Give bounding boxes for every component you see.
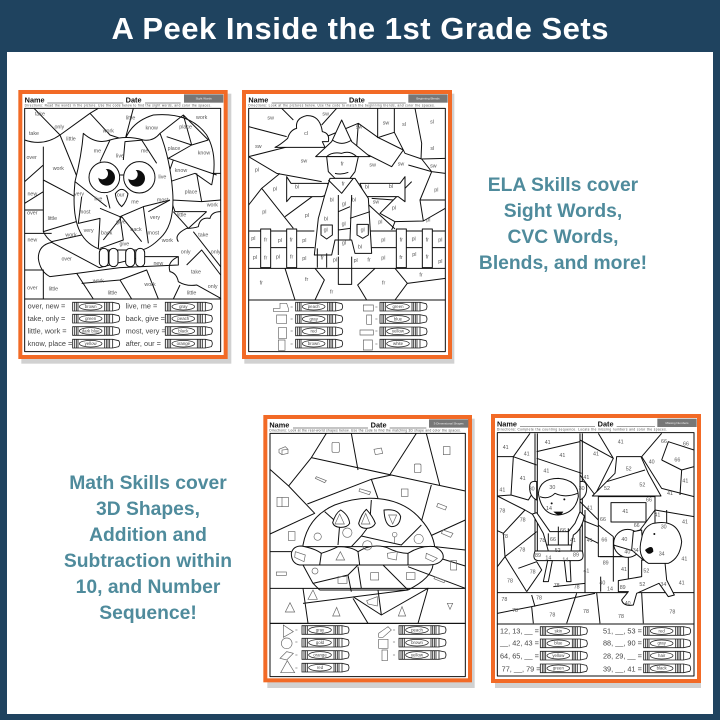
color key: = bbox=[375, 342, 378, 347]
color key: red bbox=[311, 329, 317, 334]
map numbers: 41 bbox=[499, 487, 505, 493]
map blends: pl bbox=[255, 167, 259, 173]
color key: peach bbox=[177, 316, 190, 321]
owl scene linework bbox=[25, 108, 221, 299]
map words: work bbox=[162, 238, 173, 244]
map blends: fr bbox=[264, 238, 268, 244]
map blends: bl bbox=[352, 197, 356, 203]
map numbers: 41 bbox=[682, 478, 688, 484]
Math skills callout: Math Skills cover bbox=[69, 473, 227, 494]
map numbers: 40 bbox=[621, 537, 627, 543]
map words: me bbox=[131, 200, 139, 206]
map blends: sw bbox=[267, 116, 274, 122]
map blends bbox=[251, 112, 442, 295]
map words: only bbox=[54, 124, 65, 130]
map words: live bbox=[94, 197, 102, 203]
worksheet: sight words owl: Date bbox=[126, 95, 142, 104]
map numbers: 66 bbox=[661, 439, 667, 445]
map blends: pl bbox=[305, 213, 309, 219]
color key: 77, __, 79 = bbox=[502, 664, 541, 673]
map blends: pl bbox=[381, 256, 385, 262]
map numbers: 78 bbox=[507, 578, 513, 584]
color key: dark blue bbox=[82, 328, 100, 333]
map numbers: 66 bbox=[560, 528, 566, 534]
worksheet: beginning blends scarecrow: Beginning Blends bbox=[416, 97, 440, 101]
map blends: gl bbox=[342, 201, 346, 207]
map blends: sl bbox=[402, 122, 406, 128]
worksheet: beginning blends scarecrow: Date bbox=[349, 95, 365, 104]
map words: our bbox=[117, 192, 125, 198]
color key: yellow bbox=[552, 653, 565, 658]
color key: yellow bbox=[392, 329, 405, 334]
Math skills callout: 3D Shapes, bbox=[96, 499, 200, 520]
map words: new bbox=[153, 261, 163, 267]
worksheet: number sequence kids: Date bbox=[598, 420, 614, 429]
map numbers: 78 bbox=[502, 534, 508, 540]
worksheet: 3D shapes turtle pie bbox=[265, 417, 475, 688]
color key: = bbox=[295, 627, 298, 632]
Math skills callout: Sequence! bbox=[99, 603, 197, 624]
worksheet: sight words owl: Directions: Read the words in the picture. Use the code below to find the sight words, and color the spaces. bbox=[25, 104, 211, 108]
color key: brown bbox=[308, 341, 320, 346]
color key bbox=[25, 299, 221, 352]
map numbers: 52 bbox=[639, 483, 645, 489]
color key: yellow bbox=[85, 341, 98, 346]
map numbers: 41 bbox=[618, 440, 624, 446]
worksheet: number sequence kids bbox=[493, 416, 701, 688]
map words: take bbox=[35, 112, 45, 118]
ELA skills callout bbox=[479, 175, 647, 274]
map blends: sl bbox=[430, 146, 434, 152]
color key: = bbox=[295, 652, 298, 657]
map blends: pl bbox=[278, 238, 282, 244]
map numbers: 40 bbox=[624, 549, 630, 555]
worksheet: 3D shapes turtle pie: Directions: Look at the real-world shapes below. Use the code to find the matching 3D shape and color the spaces. bbox=[269, 429, 461, 433]
map words: work bbox=[53, 166, 64, 172]
map blends: fr bbox=[264, 256, 268, 262]
map numbers: 78 bbox=[618, 614, 624, 620]
map numbers: 41 bbox=[621, 567, 627, 573]
map blends: pl bbox=[381, 238, 385, 244]
Math skills callout bbox=[64, 473, 232, 624]
map words: most bbox=[148, 230, 160, 236]
color key: __, 42, 43 = bbox=[499, 639, 539, 648]
color key: = bbox=[375, 316, 378, 321]
map numbers: 14 bbox=[545, 556, 551, 562]
map words: work bbox=[207, 203, 218, 209]
color key: gray bbox=[309, 316, 319, 321]
map numbers: 66 bbox=[683, 441, 689, 447]
map words: know bbox=[198, 151, 210, 157]
map numbers: 41 bbox=[679, 580, 685, 586]
map blends: sw bbox=[356, 124, 362, 130]
map numbers: 41 bbox=[543, 468, 549, 474]
color key: 64, 65, __ = bbox=[500, 651, 539, 660]
color key: = bbox=[375, 304, 378, 309]
map numbers: 78 bbox=[554, 583, 560, 589]
color key: orange bbox=[177, 341, 191, 346]
map numbers: 41 bbox=[622, 509, 628, 515]
color key: = bbox=[393, 627, 396, 632]
map blends: sw bbox=[369, 163, 376, 169]
color key: blue bbox=[394, 316, 403, 321]
color key: = bbox=[295, 665, 298, 670]
color key: = bbox=[375, 329, 378, 334]
color key: white bbox=[393, 341, 404, 346]
map blends: pl bbox=[302, 238, 306, 244]
map words: little bbox=[49, 286, 58, 292]
map words: back bbox=[130, 227, 142, 233]
map words: over bbox=[26, 155, 37, 161]
worksheet: sight words owl: Name bbox=[25, 95, 45, 104]
map numbers: 78 bbox=[499, 508, 505, 514]
map blends: fr bbox=[321, 255, 324, 261]
map words: know bbox=[145, 125, 158, 131]
color key: gold bbox=[316, 640, 325, 645]
color key: = bbox=[290, 304, 293, 309]
map blends: pl bbox=[378, 219, 382, 225]
title: A Peek Inside the 1st Grade Sets bbox=[112, 11, 608, 46]
map numbers: 66 bbox=[601, 538, 607, 544]
color key: after, our = bbox=[126, 339, 161, 348]
worksheet: number sequence kids: Missing Numbers bbox=[665, 421, 689, 425]
map blends: fr bbox=[260, 280, 263, 286]
map numbers: 52 bbox=[604, 486, 610, 492]
worksheet: number sequence kids: Directions: Complete the counting sequence. Locate the missing numbers and color the spaces. bbox=[497, 427, 667, 431]
map words: back bbox=[101, 230, 113, 236]
map numbers: 66 bbox=[550, 537, 556, 543]
map numbers: 89 bbox=[620, 585, 626, 591]
map numbers: 89 bbox=[535, 553, 541, 559]
map blends: bl bbox=[358, 244, 362, 250]
map numbers: 41 bbox=[559, 453, 565, 459]
map numbers: 40 bbox=[625, 601, 631, 607]
color key: know, place = bbox=[28, 339, 72, 348]
map numbers: 78 bbox=[574, 585, 580, 591]
map blends: pl bbox=[412, 252, 416, 258]
map numbers: 34 bbox=[660, 582, 666, 588]
color key: = bbox=[393, 640, 396, 645]
map blends: sw bbox=[373, 199, 379, 205]
color key: peach bbox=[411, 627, 423, 632]
map words: little bbox=[66, 137, 76, 143]
map blends: fr bbox=[399, 255, 403, 261]
map blends: bl bbox=[324, 217, 328, 223]
map numbers: 30 bbox=[661, 525, 667, 531]
map blends: gl bbox=[324, 228, 328, 234]
map numbers bbox=[499, 439, 689, 620]
map words: most bbox=[79, 210, 91, 216]
map numbers: 78 bbox=[536, 596, 542, 602]
color key: most, very = bbox=[126, 326, 166, 335]
map numbers: 52 bbox=[643, 569, 649, 575]
map blends: sw bbox=[430, 164, 437, 170]
ELA skills callout: ELA Skills cover bbox=[488, 175, 639, 196]
map numbers: 41 bbox=[524, 451, 530, 457]
map words: work bbox=[196, 115, 208, 121]
map numbers: 41 bbox=[654, 512, 660, 518]
map blends: pl bbox=[426, 217, 430, 223]
color key: gray bbox=[657, 641, 667, 646]
map numbers: 66 bbox=[600, 517, 606, 523]
map blends: fr bbox=[367, 257, 371, 263]
map words: very bbox=[150, 215, 160, 221]
worksheet: sight words owl: Sight Words bbox=[196, 97, 212, 101]
map words: over bbox=[27, 285, 38, 291]
map words: know bbox=[175, 168, 187, 174]
map blends: fr bbox=[330, 289, 334, 295]
map words: live bbox=[158, 174, 166, 180]
map blends: gl bbox=[342, 222, 346, 228]
map numbers: 14 bbox=[546, 506, 552, 512]
color key: red bbox=[317, 665, 324, 670]
color key: brown bbox=[85, 304, 97, 309]
map numbers: 66 bbox=[674, 458, 680, 464]
worksheet: sight words owl bbox=[20, 92, 231, 364]
map words: me bbox=[141, 149, 148, 155]
map words: give bbox=[116, 219, 126, 225]
map numbers: 41 bbox=[682, 519, 688, 525]
map blends: gl bbox=[361, 228, 365, 234]
Math skills callout: Addition and bbox=[89, 525, 207, 546]
color key: gray bbox=[179, 304, 188, 309]
map numbers: 89 bbox=[603, 561, 609, 567]
map numbers: 66 bbox=[634, 523, 640, 529]
map blends: bl bbox=[365, 185, 369, 191]
map blends: fr bbox=[341, 162, 344, 168]
map numbers: 41 bbox=[570, 538, 576, 544]
color key: take, only = bbox=[28, 314, 65, 323]
map numbers: 41 bbox=[587, 538, 593, 544]
map words: little bbox=[48, 216, 57, 222]
worksheet: 3D shapes turtle pie: 3-Dimensional Shapes bbox=[434, 422, 464, 426]
map numbers: 78 bbox=[512, 608, 518, 614]
color key bbox=[270, 623, 465, 677]
map numbers: 41 bbox=[520, 476, 526, 482]
map blends: pl bbox=[251, 236, 255, 242]
ELA skills callout: Sight Words, bbox=[504, 201, 622, 222]
map words: give bbox=[119, 242, 129, 248]
map words: take bbox=[198, 232, 208, 238]
map blends: pl bbox=[253, 255, 257, 261]
map numbers: 41 bbox=[503, 445, 509, 451]
map words: work bbox=[144, 282, 156, 288]
color key: black bbox=[657, 666, 668, 671]
map numbers: 41 bbox=[681, 557, 687, 563]
map blends: pl bbox=[333, 257, 337, 263]
color key: little, work = bbox=[28, 326, 67, 335]
map blends: bl bbox=[389, 184, 393, 190]
map numbers: 52 bbox=[555, 548, 561, 554]
color key: = bbox=[290, 342, 293, 347]
map blends: sw bbox=[255, 144, 262, 150]
map numbers: 41 bbox=[587, 506, 593, 512]
map words: over bbox=[61, 256, 72, 262]
color key: 88, __, 90 = bbox=[603, 639, 642, 648]
map blends: fr bbox=[290, 255, 294, 261]
color key: yellow bbox=[411, 652, 424, 657]
color key: green bbox=[85, 316, 97, 321]
map words: only bbox=[181, 249, 191, 255]
map blends: pl bbox=[438, 237, 442, 243]
color key: peach bbox=[308, 304, 320, 309]
color key: 51, __, 53 = bbox=[603, 626, 642, 635]
map words bbox=[26, 112, 221, 297]
map blends: pl bbox=[412, 236, 416, 242]
map blends: bl bbox=[295, 184, 299, 190]
map numbers: 78 bbox=[549, 613, 555, 619]
map words: only bbox=[208, 284, 218, 290]
map numbers: 78 bbox=[583, 609, 589, 615]
worksheet: 3D shapes turtle pie: Date bbox=[371, 420, 387, 429]
map numbers: 30 bbox=[529, 487, 535, 493]
map numbers: 78 bbox=[520, 518, 526, 524]
map words: little bbox=[126, 115, 135, 121]
map numbers: 78 bbox=[530, 570, 536, 576]
map numbers: 40 bbox=[599, 581, 605, 587]
map words: only bbox=[211, 249, 221, 255]
color key: green bbox=[553, 666, 564, 671]
map blends: fr bbox=[419, 272, 423, 278]
color key bbox=[497, 624, 694, 676]
color key: black bbox=[178, 328, 189, 333]
map blends: sw bbox=[301, 159, 307, 165]
map numbers: 41 bbox=[545, 440, 551, 446]
color key bbox=[249, 300, 445, 352]
map blends: sl bbox=[430, 120, 434, 126]
map numbers: 30 bbox=[579, 486, 585, 492]
color key: live, me = bbox=[126, 301, 157, 310]
map words: new bbox=[27, 191, 37, 197]
map blends: pl bbox=[438, 259, 442, 265]
color key: skin bbox=[554, 628, 563, 633]
worksheet: 3D shapes turtle pie: Name bbox=[269, 420, 289, 429]
map blends: fr bbox=[305, 277, 309, 283]
scarecrow scene linework bbox=[249, 108, 445, 300]
ELA skills callout: Blends, and more! bbox=[479, 253, 647, 274]
map numbers: 78 bbox=[519, 547, 525, 553]
map blends: fr bbox=[382, 280, 386, 286]
color key: red bbox=[659, 628, 665, 633]
small shape icons bbox=[276, 442, 457, 616]
map numbers: 34 bbox=[633, 548, 639, 554]
map blends: sw bbox=[322, 112, 329, 118]
map words: me bbox=[94, 149, 101, 155]
map words: most bbox=[157, 198, 169, 204]
worksheet: beginning blends scarecrow bbox=[244, 92, 454, 364]
map numbers: 78 bbox=[501, 597, 507, 603]
map words: take bbox=[191, 269, 201, 275]
map words: very bbox=[84, 228, 94, 234]
map blends: fr bbox=[426, 255, 429, 261]
color key: 28, 29, __ = bbox=[603, 651, 642, 660]
map numbers: 52 bbox=[639, 582, 645, 588]
map words: work bbox=[93, 278, 104, 284]
map blends: sw bbox=[398, 162, 404, 168]
map words: place bbox=[168, 146, 180, 152]
map blends: fr bbox=[290, 238, 293, 244]
color key: gray bbox=[316, 627, 325, 632]
map words: work bbox=[65, 233, 77, 239]
pie scene linework bbox=[270, 433, 465, 623]
color key: blue bbox=[554, 641, 563, 646]
map numbers: 14 bbox=[607, 587, 613, 593]
map blends: pl bbox=[273, 186, 277, 192]
map blends: pl bbox=[262, 210, 266, 216]
map numbers: 89 bbox=[573, 553, 579, 559]
worksheet: beginning blends scarecrow: Name bbox=[248, 95, 268, 104]
color key: = bbox=[290, 316, 293, 321]
map numbers: 41 bbox=[583, 569, 589, 575]
worksheet: beginning blends scarecrow: Directions: Look at the pictures below. Use the code to match the beginning blends, and color the spaces. bbox=[248, 104, 435, 108]
color key: brown bbox=[411, 640, 423, 645]
map numbers: 34 bbox=[659, 551, 665, 557]
map numbers: 41 bbox=[583, 475, 589, 481]
map numbers: 78 bbox=[539, 538, 545, 544]
color key: over, new = bbox=[28, 301, 65, 310]
map numbers: 52 bbox=[626, 467, 632, 473]
color key: hair bbox=[658, 653, 666, 658]
map words: little bbox=[187, 291, 196, 297]
map words: very bbox=[74, 191, 84, 197]
map blends: fr bbox=[342, 182, 345, 188]
map blends: fr bbox=[426, 238, 429, 244]
map numbers: 78 bbox=[669, 609, 675, 615]
map numbers: 41 bbox=[593, 452, 599, 458]
ELA skills callout: CVC Words, bbox=[507, 227, 619, 248]
color key: 39, __, 41 = bbox=[603, 664, 642, 673]
map blends: sw bbox=[383, 121, 389, 127]
map words: over bbox=[27, 210, 38, 216]
map words: live bbox=[116, 153, 124, 159]
map numbers: 30 bbox=[549, 485, 555, 491]
map blends: pl bbox=[276, 254, 280, 260]
map blends: bl bbox=[330, 198, 334, 204]
map numbers: 66 bbox=[646, 498, 652, 504]
color key: orange bbox=[313, 652, 327, 657]
map blends: pl bbox=[354, 258, 358, 264]
color key: = bbox=[295, 640, 298, 645]
map numbers: 40 bbox=[649, 460, 655, 466]
map blends: fr bbox=[400, 238, 403, 244]
color key: = bbox=[393, 652, 396, 657]
color key: back, give = bbox=[126, 314, 165, 323]
map numbers: 14 bbox=[562, 557, 568, 563]
kids scene linework bbox=[497, 433, 694, 623]
color key: = bbox=[290, 329, 293, 334]
Math skills callout: 10, and Number bbox=[76, 577, 221, 598]
map blends: pl bbox=[434, 188, 438, 194]
map words: little bbox=[177, 212, 186, 218]
map blends: pl bbox=[392, 205, 396, 211]
map numbers: 41 bbox=[667, 491, 673, 497]
map words: work bbox=[103, 129, 114, 135]
map blends: gl bbox=[342, 240, 346, 246]
worksheet: number sequence kids: Name bbox=[497, 420, 517, 429]
Math skills callout: Subtraction within bbox=[64, 551, 232, 572]
map words: take bbox=[29, 131, 39, 137]
color key: 12, 13, __ = bbox=[500, 626, 539, 635]
map blends: cl bbox=[304, 131, 308, 137]
color key: green bbox=[392, 304, 404, 309]
map words: little bbox=[108, 291, 117, 297]
map blends: pl bbox=[302, 256, 306, 262]
map words: place bbox=[179, 124, 192, 130]
map words: place bbox=[185, 190, 197, 196]
map words: new bbox=[27, 237, 37, 243]
